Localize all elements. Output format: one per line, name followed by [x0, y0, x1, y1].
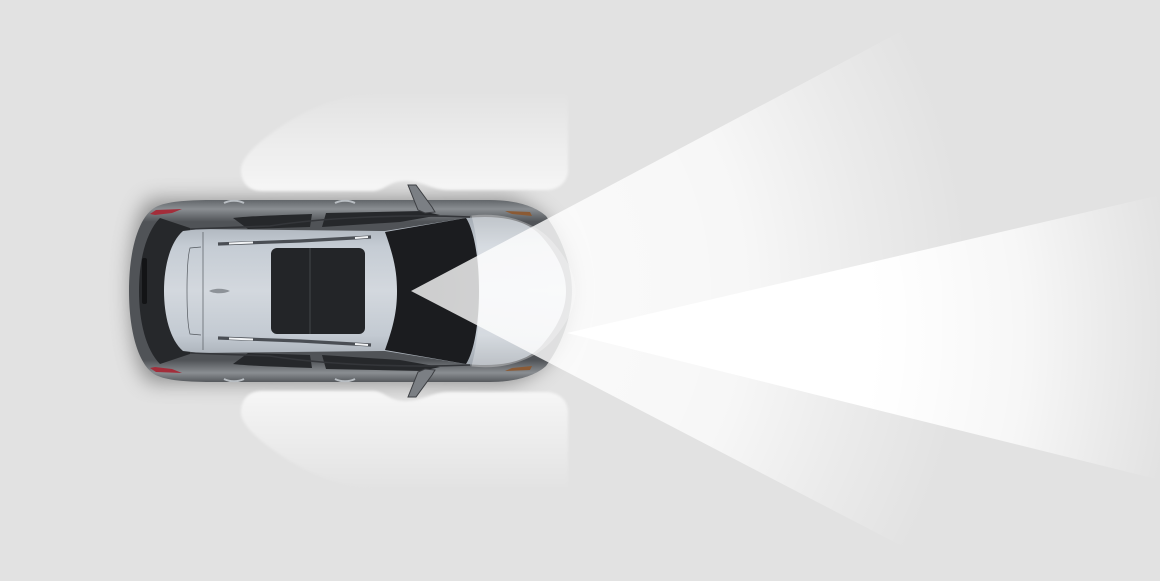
- mirror bottom: [408, 369, 435, 397]
- car shadow: [130, 198, 572, 384]
- hood glass overlay: [472, 215, 575, 367]
- roof rail bottom: [218, 338, 371, 345]
- tailgate lines: [187, 232, 203, 350]
- door handles bottom: [224, 379, 355, 381]
- rear window slot: [142, 258, 147, 304]
- roof rail top: [218, 237, 371, 244]
- main light beam: [567, 195, 1160, 480]
- mirror top: [408, 185, 435, 213]
- side windows bottom: [233, 353, 440, 371]
- light zone: upper side: [241, 92, 568, 191]
- sunroof: [271, 248, 365, 334]
- car body: [129, 200, 572, 382]
- windshield: [385, 218, 479, 364]
- tail light top: [150, 209, 182, 215]
- side windows top: [233, 211, 440, 229]
- front indicator bottom: [505, 366, 532, 371]
- tail light bottom: [150, 367, 182, 373]
- wide light beam: [411, 0, 1000, 581]
- shark fin antenna: [209, 289, 230, 293]
- light zone: lower side: [241, 391, 568, 490]
- front indicator top: [505, 211, 532, 216]
- rear hatch dark: [139, 218, 190, 364]
- upper body crease: [190, 216, 470, 229]
- car: [129, 185, 572, 397]
- door handles top: [224, 201, 355, 203]
- roof and hood panel: [164, 217, 566, 365]
